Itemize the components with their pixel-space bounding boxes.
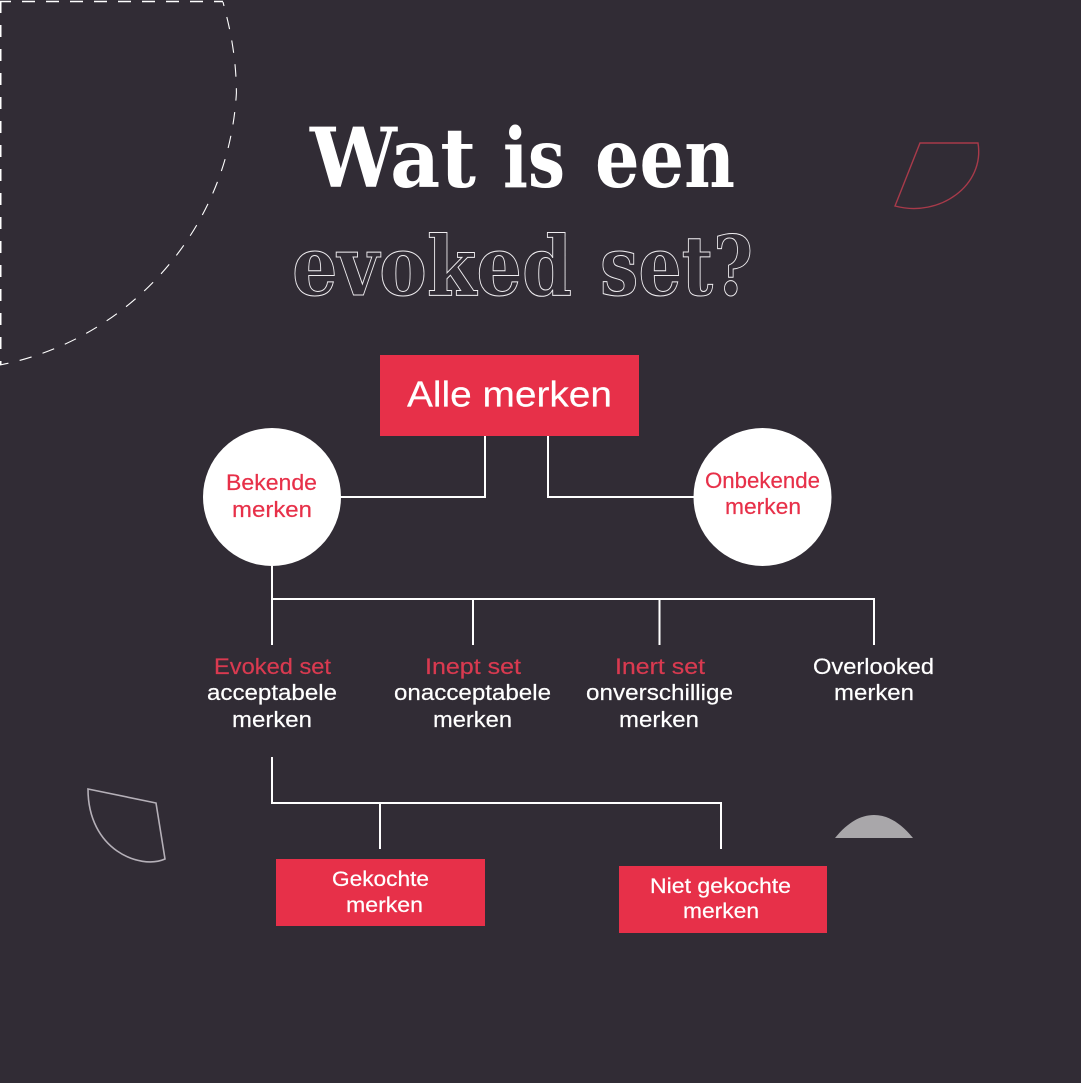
title: set?	[600, 219, 753, 315]
connector lines: middle	[272, 566, 874, 645]
label: Inert set: Inert set	[615, 654, 706, 679]
label: Overlooked merken: merken	[834, 680, 914, 705]
box: Gekochte merken	[276, 859, 485, 926]
circle: Bekende merken: Bekende	[226, 470, 317, 495]
label: Inert set	[586, 654, 733, 732]
box: Alle merken	[380, 355, 639, 436]
circle: Onbekende merken: merken	[725, 494, 801, 519]
label: Inept set: onacceptabele	[394, 680, 551, 705]
decorative dashed quarter circle	[0, 1, 236, 365]
box: Alle merken: Alle merken	[407, 374, 612, 414]
box: Gekochte merken: Gekochte	[332, 867, 429, 891]
title	[292, 111, 753, 315]
title: Wat	[309, 111, 476, 207]
label: Evoked set: merken	[232, 707, 312, 732]
label: Inert set: merken	[619, 707, 699, 732]
box: Niet gekochte merken: Niet gekochte	[650, 874, 791, 898]
label: Evoked set: acceptabele	[207, 680, 337, 705]
box: Niet gekochte merken: merken	[683, 899, 759, 923]
label: Inept set: merken	[433, 707, 512, 732]
icon: red outlined leaf	[895, 143, 979, 208]
icon: grey dome	[835, 815, 913, 838]
title: een	[595, 111, 735, 207]
label: Overlooked merken: Overlooked	[813, 654, 934, 679]
circle: Onbekende merken	[694, 428, 832, 566]
label: Evoked set	[207, 654, 337, 732]
label: Inept set	[394, 654, 551, 732]
circle: Onbekende merken: Onbekende	[705, 468, 820, 493]
label: Inept set: Inept set	[425, 654, 522, 679]
label: Inert set: onverschillige	[586, 680, 733, 705]
title: evoked	[292, 219, 572, 315]
connector lines: bottom	[272, 757, 721, 849]
label: Overlooked merken	[813, 654, 934, 705]
connector lines: top	[340, 436, 694, 497]
circle: Bekende merken	[203, 428, 341, 566]
circle: Bekende merken: merken	[232, 497, 312, 522]
icon: grey outlined leaf	[88, 789, 165, 862]
label: Evoked set: Evoked set	[214, 654, 332, 679]
box: Niet gekochte merken	[619, 866, 827, 933]
box: Gekochte merken: merken	[346, 893, 423, 917]
title: is	[503, 111, 565, 207]
